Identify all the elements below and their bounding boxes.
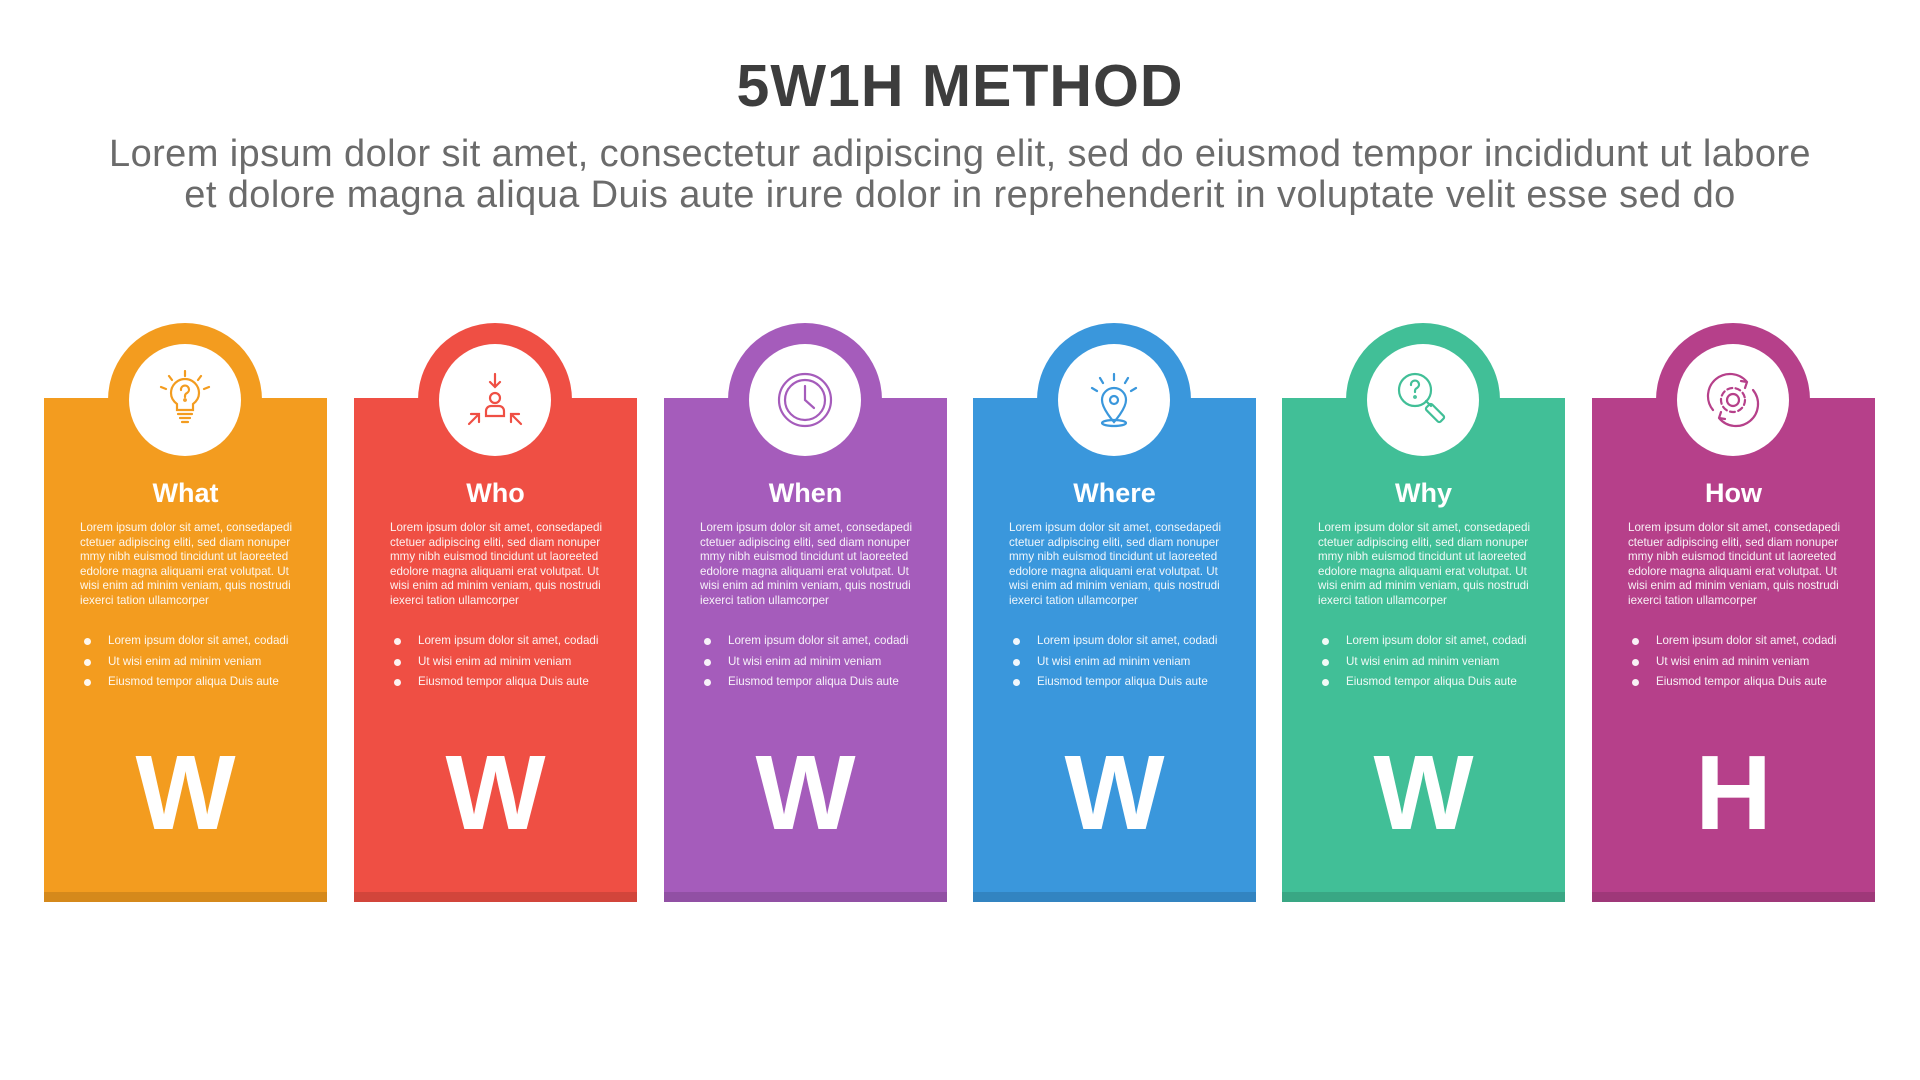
- bullet list: Lorem ipsum dolor sit amet, codadi: [1346, 634, 1526, 647]
- text block: Lorem ipsum dolor sit amet, consedapedi ctetuer adipiscing eliti, sed diam nonuper mmy nibh euismod tincidunt ut laoreeted edolore magna aliquami erat volutpat. Ut wisi enim ad minim veniam, quis nostrudi iexerci tation ullamcorper: [1318, 521, 1530, 607]
- bullet list: Lorem ipsum dolor sit amet, codadi: [728, 634, 908, 647]
- icon: magnifier question: [1367, 344, 1479, 456]
- bullet list: Ut wisi enim ad minim veniam: [728, 654, 881, 668]
- icon: location pin: [1058, 344, 1170, 456]
- subtitle: [109, 133, 1811, 216]
- bullet list: Eiusmod tempor aliqua Duis aute: [418, 675, 589, 688]
- text block: Lorem ipsum dolor sit amet, consedapedi ctetuer adipiscing eliti, sed diam nonuper mmy nibh euismod tincidunt ut laoreeted edolore magna aliquami erat volutpat. Ut wisi enim ad minim veniam, quis nostrudi iexerci tation ullamcorper: [390, 521, 602, 607]
- letter: W: [755, 734, 856, 852]
- title: 5W1H METHOD: [737, 53, 1183, 119]
- bullet list: Ut wisi enim ad minim veniam: [1037, 654, 1190, 668]
- bullet list: Lorem ipsum dolor sit amet, codadi: [108, 634, 288, 647]
- icon: person: [439, 344, 551, 456]
- heading: When: [769, 478, 842, 508]
- subtitle: et dolore magna aliqua Duis aute irure dolor in reprehenderit in voluptate velit esse sed do: [184, 174, 1736, 216]
- bullet list: [1632, 634, 1836, 688]
- text block: Lorem ipsum dolor sit amet, consedapedi ctetuer adipiscing eliti, sed diam nonuper mmy nibh euismod tincidunt ut laoreeted edolore magna aliquami erat volutpat. Ut wisi enim ad minim veniam, quis nostrudi iexerci tation ullamcorper: [1009, 521, 1221, 607]
- text block: Lorem ipsum dolor sit amet, consedapedi ctetuer adipiscing eliti, sed diam nonuper mmy nibh euismod tincidunt ut laoreeted edolore magna aliquami erat volutpat. Ut wisi enim ad minim veniam, quis nostrudi iexerci tation ullamcorper: [1628, 521, 1840, 607]
- panel: why: [1282, 323, 1565, 902]
- bullet list: [1013, 634, 1217, 688]
- panel: what: [44, 323, 327, 902]
- letter: W: [135, 734, 236, 852]
- icon: lightbulb: [129, 344, 241, 456]
- icon: gear cycle: [1677, 344, 1789, 456]
- heading: Who: [466, 478, 525, 508]
- bullet list: Eiusmod tempor aliqua Duis aute: [1346, 675, 1517, 688]
- letter: W: [1373, 734, 1474, 852]
- panel: when: [664, 323, 947, 902]
- bullet list: Lorem ipsum dolor sit amet, codadi: [1656, 634, 1836, 647]
- text block: Lorem ipsum dolor sit amet, consedapedi ctetuer adipiscing eliti, sed diam nonuper mmy nibh euismod tincidunt ut laoreeted edolore magna aliquami erat volutpat. Ut wisi enim ad minim veniam, quis nostrudi iexerci tation ullamcorper: [80, 521, 292, 607]
- bullet list: Eiusmod tempor aliqua Duis aute: [728, 675, 899, 688]
- bullet list: [704, 634, 908, 688]
- panel: where: [973, 323, 1256, 902]
- letter: H: [1695, 734, 1772, 852]
- letter: W: [1064, 734, 1165, 852]
- text block: Lorem ipsum dolor sit amet, consedapedi ctetuer adipiscing eliti, sed diam nonuper mmy nibh euismod tincidunt ut laoreeted edolore magna aliquami erat volutpat. Ut wisi enim ad minim veniam, quis nostrudi iexerci tation ullamcorper: [700, 521, 912, 607]
- panel: who: [354, 323, 637, 902]
- letter: W: [445, 734, 546, 852]
- bullet list: Ut wisi enim ad minim veniam: [1346, 654, 1499, 668]
- heading: How: [1705, 478, 1762, 508]
- subtitle: Lorem ipsum dolor sit amet, consectetur adipiscing elit, sed do eiusmod tempor incididunt ut labore: [109, 133, 1811, 175]
- bullet list: [394, 634, 598, 688]
- bullet list: Lorem ipsum dolor sit amet, codadi: [1037, 634, 1217, 647]
- bullet list: Eiusmod tempor aliqua Duis aute: [108, 675, 279, 688]
- icon: clock: [749, 344, 861, 456]
- heading: What: [152, 478, 218, 508]
- bullet list: Eiusmod tempor aliqua Duis aute: [1037, 675, 1208, 688]
- bullet list: Ut wisi enim ad minim veniam: [108, 654, 261, 668]
- bullet list: Eiusmod tempor aliqua Duis aute: [1656, 675, 1827, 688]
- bullet list: [84, 634, 288, 688]
- bullet list: Ut wisi enim ad minim veniam: [418, 654, 571, 668]
- heading: Where: [1073, 478, 1156, 508]
- bullet list: Lorem ipsum dolor sit amet, codadi: [418, 634, 598, 647]
- bullet list: [1322, 634, 1526, 688]
- bullet list: Ut wisi enim ad minim veniam: [1656, 654, 1809, 668]
- panel: how: [1592, 323, 1875, 902]
- heading: Why: [1395, 478, 1452, 508]
